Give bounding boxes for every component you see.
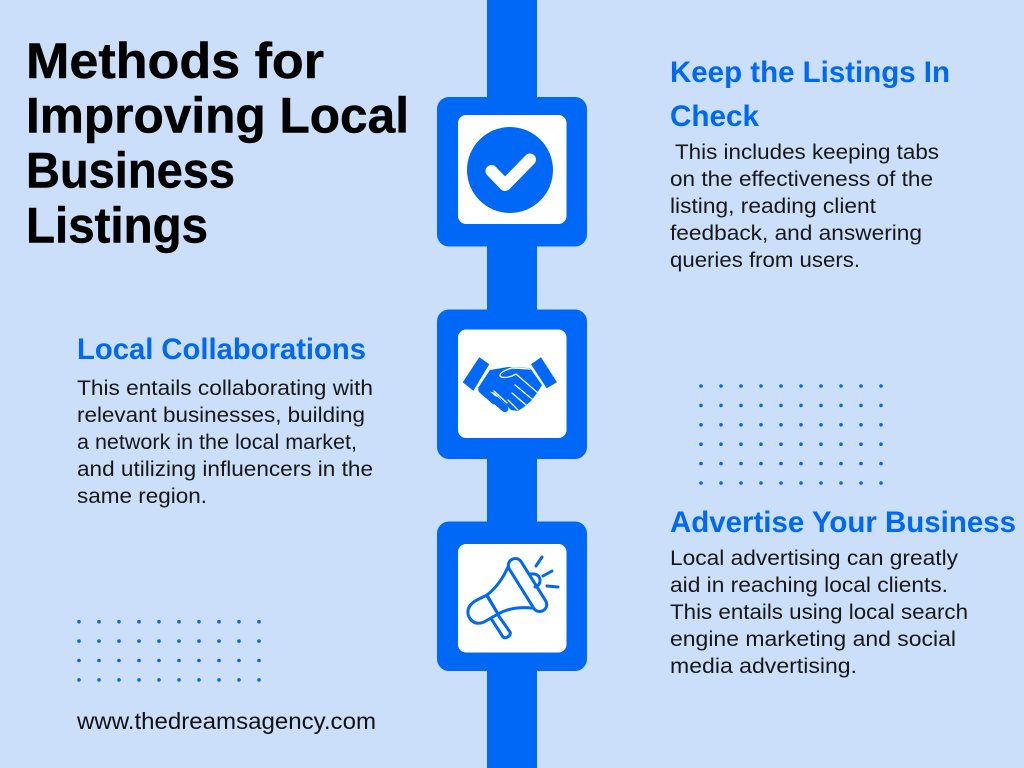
heading: keep the listings in check: Check xyxy=(670,100,759,133)
text block: local collaborations description: This entails collaborating with xyxy=(77,377,373,400)
text block: advertise description xyxy=(670,547,968,678)
icon: handshake badge xyxy=(437,310,587,459)
panel: keep the listings in check xyxy=(670,56,950,272)
title xyxy=(26,33,409,254)
website url: www.thedreamsagency.com xyxy=(76,708,376,734)
text block: advertise description: media advertising. xyxy=(670,655,857,678)
text block: local collaborations description: a network in the local market, xyxy=(77,431,357,454)
text block: advertise description: aid in reaching local clients. xyxy=(670,574,948,597)
title: Business xyxy=(26,142,235,198)
text block: local collaborations description: and utilizing influencers in the xyxy=(77,458,373,481)
heading: advertise your business: Advertise Your Business xyxy=(670,506,1016,539)
title: Methods for xyxy=(26,33,324,89)
panel: local collaborations xyxy=(77,333,373,508)
heading: keep the listings in check xyxy=(670,56,950,133)
text block: keep the listings description: This includes keeping tabs xyxy=(675,141,939,164)
text block: local collaborations description: relevant businesses, building xyxy=(77,404,365,427)
text block: advertise description: engine marketing and social xyxy=(670,628,956,651)
text block: keep the listings description: listing, reading client xyxy=(670,195,876,218)
text block: keep the listings description: feedback, and answering xyxy=(670,222,922,245)
heading: keep the listings in check: Keep the Listings In xyxy=(670,56,950,89)
dot pattern: right xyxy=(699,384,883,485)
text block: advertise description: Local advertising can greatly xyxy=(670,547,959,570)
icon: check mark badge xyxy=(437,97,587,246)
text block: keep the listings description: queries from users. xyxy=(670,249,860,272)
text block: keep the listings description xyxy=(670,141,939,272)
title: Improving Local xyxy=(26,88,409,144)
title: Listings xyxy=(26,198,208,254)
text block: local collaborations description xyxy=(77,377,373,508)
dot pattern: left xyxy=(77,620,261,682)
heading: local collaborations: Local Collaborations xyxy=(77,333,366,366)
text block: local collaborations description: same region. xyxy=(77,485,207,508)
text block: advertise description: This entails using local search xyxy=(670,601,968,624)
panel: advertise your business xyxy=(670,506,1016,678)
text block: keep the listings description: on the effectiveness of the xyxy=(670,168,933,191)
icon: megaphone badge xyxy=(437,522,587,671)
